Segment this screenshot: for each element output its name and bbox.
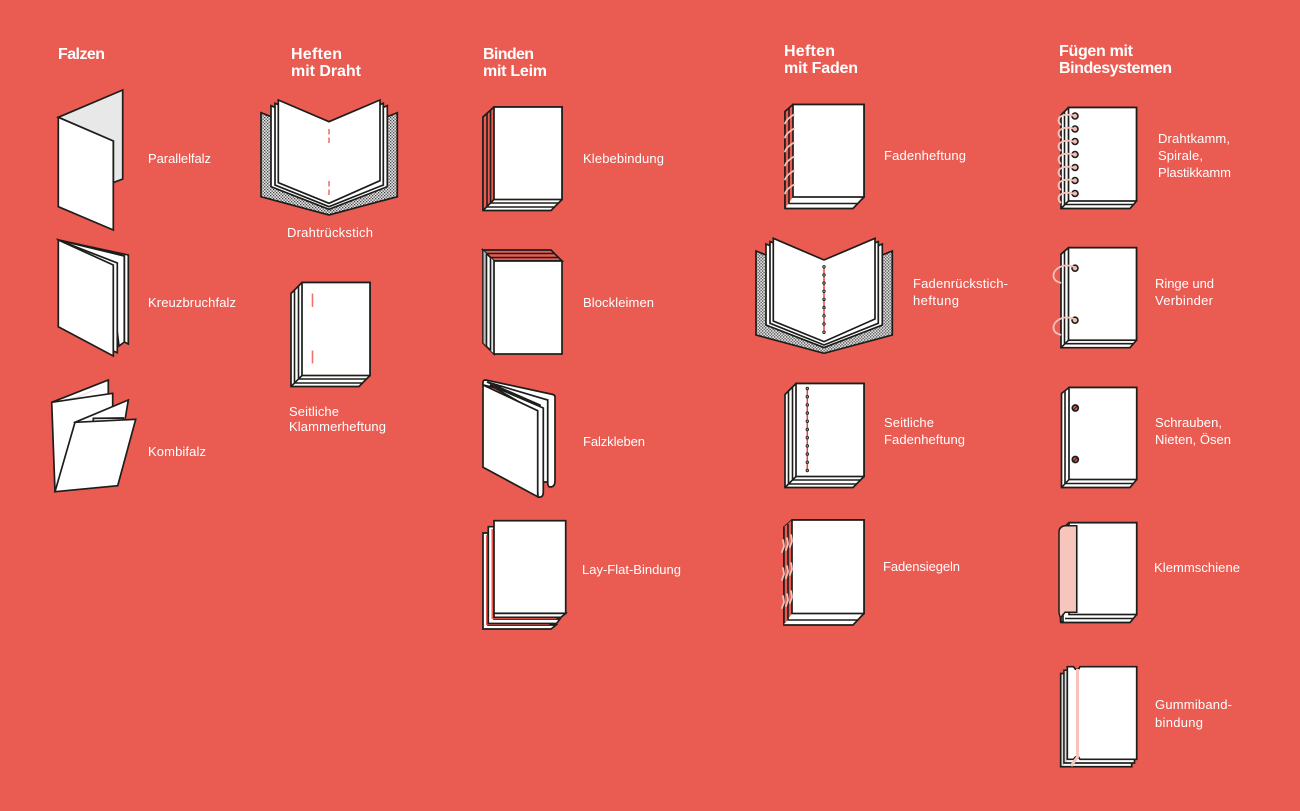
icon: parallel fold [58,90,123,230]
column: Falzen [52,46,236,492]
heading: Heften mit Faden [784,43,858,77]
heading: Heften mit Draht: Heften [291,46,342,63]
heading: Fügen mit Bindesystemen [1059,43,1172,77]
icon: ring-bound book [1054,248,1136,348]
heading: Binden mit Leim [483,46,547,80]
icon: block-glued book with red top [483,250,562,354]
column: Fügen mit Bindesystemen [1054,43,1240,767]
heading: Heften mit Faden: Heften [784,43,835,60]
column: Heften mit Faden [756,43,1008,625]
item: Parallelfalz [58,90,211,230]
label: Ringe und Verbinder: Ringe und [1155,276,1214,291]
column: Heften mit Draht [261,46,397,434]
label: Seitliche Fadenheftung [884,415,965,447]
column: Binden mit Leim [483,46,681,629]
label: Ringe und Verbinder: Verbinder [1155,293,1214,308]
label: Seitliche Klammerheftung [289,404,386,434]
heading: Heften mit Draht: mit Draht [291,63,362,80]
label: Kreuzbruchfalz: Kreuzbruchfalz [148,295,236,310]
label: Gummibandbindung: Gummiband- [1155,697,1232,712]
label: Ringe und Verbinder [1155,276,1214,308]
label: Fadenrückstichheftung: Fadenrückstich- [913,276,1008,291]
label: Parallelfalz: Parallelfalz [148,151,211,166]
heading: Falzen: Falzen [58,46,105,63]
icon: clamp-bound book [1059,523,1137,622]
label: Drahtkamm, Spirale, Plastikkamm: Drahtkamm, [1158,131,1230,146]
label: Fadenheftung: Fadenheftung [884,148,966,163]
icon: combination fold [52,380,136,492]
item: Seitliche Fadenheftung [785,384,965,488]
item: Lay-Flat-Bindung [483,521,681,629]
heading: Heften mit Draht [291,46,362,80]
label: Kombifalz: Kombifalz [148,444,206,459]
label: Schrauben, Nieten, Ösen: Schrauben, [1155,415,1222,430]
label: Falzkleben: Falzkleben [583,434,645,449]
label: Drahtkamm, Spirale, Plastikkamm: Plastikkamm [1158,165,1231,180]
item: Schrauben, Nieten, Ösen [1062,388,1231,488]
item: Fadensiegeln [782,520,960,625]
label: Klebebindung: Klebebindung [583,151,664,166]
heading: Binden mit Leim: mit Leim [483,63,547,80]
item: Kreuzbruchfalz [58,240,236,356]
icon: open thread-stitched book [756,238,892,353]
label: Fadensiegeln: Fadensiegeln [883,559,960,574]
label: Schrauben, Nieten, Ösen [1155,415,1231,447]
item: Klemmschiene [1059,523,1240,622]
item: Seitliche Klammerheftung [289,282,386,434]
label: Lay-Flat-Bindung: Lay-Flat-Bindung [582,562,681,577]
label: Fadenrückstichheftung: heftung [913,293,959,308]
icon: spiral-bound book [1058,108,1136,208]
icon: side-sewn book [785,384,864,488]
icon: fold-glued book [483,380,555,497]
icon: open saddle-stitched book [261,100,397,215]
label: Blockleimen: Blockleimen [583,295,654,310]
label: Klemmschiene: Klemmschiene [1154,560,1240,575]
label: Gummibandbindung: bindung [1155,715,1203,730]
label: Seitliche Klammerheftung: Seitliche [289,404,339,419]
item: Klebebindung [483,107,664,210]
icon: screw-bound book [1062,388,1137,488]
heading: Heften mit Faden: mit Faden [784,60,858,77]
label: Seitliche Fadenheftung: Seitliche [884,415,934,430]
label: Drahtkamm, Spirale, Plastikkamm [1158,131,1231,180]
heading: Binden mit Leim: Binden [483,46,534,63]
item: Kombifalz [52,380,206,492]
heading: Fügen mit Bindesystemen: Fügen mit [1059,43,1134,60]
item: Gummibandbindung [1061,667,1232,767]
item: Drahtkamm, Spirale, Plastikkamm [1058,108,1231,208]
label: Gummibandbindung [1155,697,1232,730]
item: Fadenheftung [785,104,966,208]
label: Fadenrückstichheftung [913,276,1008,308]
icon: lay-flat book [483,521,566,629]
item: Ringe und Verbinder [1054,248,1214,348]
item: Fadenrückstichheftung [756,238,1008,353]
icon: side-stapled book [291,282,370,386]
icon: elastic-band-bound book [1061,667,1137,767]
label: Schrauben, Nieten, Ösen: Nieten, Ösen [1155,432,1231,447]
label: Drahtrückstich: Drahtrückstich [287,225,373,240]
label: Seitliche Klammerheftung: Klammerheftung [289,419,386,434]
icon: thread-sewn book [785,104,864,208]
label: Drahtkamm, Spirale, Plastikkamm: Spirale, [1158,148,1203,163]
icon: cross fold [58,240,128,356]
icon: thread-sealed book [782,520,864,625]
heading: Fügen mit Bindesystemen: Bindesystemen [1059,60,1172,77]
item: Falzkleben [483,380,645,497]
label: Seitliche Fadenheftung: Fadenheftung [884,432,965,447]
item: Drahtrückstich [261,100,397,240]
icon: glued book with red spine [483,107,562,210]
item: Blockleimen [483,250,654,354]
